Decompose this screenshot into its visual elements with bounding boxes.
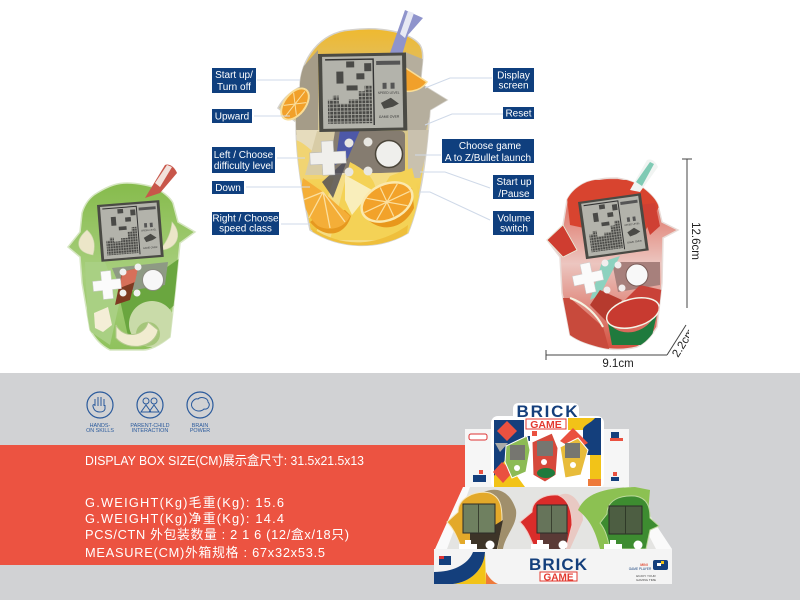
front panel corner art (434, 552, 498, 584)
front panel logo: GAMING TIME (636, 578, 656, 582)
label: display screen: Display (497, 70, 530, 82)
melon (129, 301, 175, 347)
icon: hands-on skills: ON SKILLS (86, 428, 114, 434)
dimension: width 9.1cm (546, 350, 667, 370)
front panel logo: ENJOY YOUR (636, 574, 657, 578)
watermelon half (608, 316, 657, 345)
display box (434, 402, 672, 584)
icon: hands-on skills: HANDS- (90, 423, 111, 429)
ear slices (79, 230, 94, 255)
box title: brick game top: BRICK (516, 402, 578, 421)
label: display screen (493, 68, 534, 92)
label: reset: Reset (505, 108, 532, 120)
text: pcs per carton: PCS/CTN 外包装数量 : 2 1 6 (12/盒x/18只) (85, 527, 349, 542)
box header artwork (491, 403, 604, 489)
label: start up / turn off: Start up/ (215, 70, 253, 81)
toy: green melon console (68, 165, 195, 350)
box front panel (434, 549, 672, 584)
melon slices (116, 322, 158, 346)
text: gross weight: G.WEIGHT(Kg)毛重(Kg): 15.6 (85, 495, 284, 510)
label: display screen: screen (498, 80, 529, 92)
front panel logo (629, 560, 668, 582)
label: volume switch: switch (500, 224, 528, 234)
label: choose game a to z / bullet launch (442, 139, 534, 164)
green toys row (578, 487, 659, 549)
dpads and buttons (459, 540, 642, 550)
yellow toys row (447, 490, 516, 549)
label: left / choose difficulty level: difficulty level (214, 161, 273, 172)
box back panel (465, 429, 629, 489)
mini red toy (532, 433, 558, 482)
side logos (469, 432, 623, 482)
text: display box size: DISPLAY BOX SIZE(CM)展示盒尺寸: 31.5x21.5x13 (85, 453, 364, 468)
bottom grey band (0, 373, 800, 600)
orange slice ear left (274, 82, 316, 126)
box title: brick game top: GAME (530, 419, 562, 431)
label: start up / turn off: Turn off (217, 82, 251, 93)
label: start up / pause (493, 175, 534, 200)
straw lower (335, 130, 360, 165)
label: start up / pause: Start up (496, 177, 532, 188)
label: left / choose difficulty level: Left / Choose (214, 150, 274, 161)
label: start up / pause: /Pause (498, 189, 530, 200)
red specification band (0, 445, 466, 565)
red toys row (520, 494, 583, 549)
screen (318, 52, 407, 132)
leader lines (246, 78, 503, 224)
tray interior (437, 487, 670, 549)
icon: parent-child interaction (130, 392, 170, 434)
orange slice left bottom (310, 210, 351, 233)
mini green toy (505, 436, 530, 478)
controls (92, 270, 122, 300)
label: choose game a to z / bullet launch: A to Z/Bullet launch (445, 153, 531, 164)
label: start up / turn off (212, 68, 256, 93)
straw (390, 10, 423, 55)
front panel logo: GAME PLAYER (629, 567, 652, 571)
icon: brain power: BRAIN (192, 423, 208, 429)
dimension: height 12.6cm: 12.6cm (689, 222, 701, 260)
icon: parent-child interaction: INTERACTION (132, 428, 168, 434)
label: volume switch: Volume (497, 214, 531, 224)
label: upward: Upward (215, 112, 249, 122)
screen (578, 193, 649, 259)
dimension: depth 2.2cm: 2.2cm (670, 327, 697, 360)
box title: brick game front: GAME (544, 572, 574, 584)
melon cubes (94, 307, 112, 332)
dimension: width 9.1cm: 9.1cm (602, 358, 634, 370)
console window (334, 131, 405, 173)
box title: brick game front (529, 555, 588, 584)
label: right / choose speed class: Right / Choose (212, 214, 279, 224)
controls (570, 260, 606, 296)
screen: SPEED LEVEL (624, 223, 641, 227)
screen: GAME OVER (627, 240, 642, 245)
straw (630, 159, 658, 192)
icon: brain power (187, 392, 213, 434)
screen: SPEED LEVEL (378, 91, 400, 95)
ear slices (547, 225, 577, 257)
screen: GAME OVER (379, 115, 400, 119)
orange slice ear right (397, 63, 427, 91)
screen: GAME OVER (143, 246, 158, 250)
label: left / choose difficulty level (212, 147, 275, 173)
icon: hands-on skills (86, 392, 114, 434)
text: carton measure: MEASURE(CM)外箱规格 : 67x32x53.5 (85, 545, 325, 560)
box title: brick game front: BRICK (529, 555, 588, 574)
label: volume switch (493, 211, 534, 235)
toy: watermelon console (547, 159, 678, 352)
icon: parent-child interaction: PARENT-CHILD (130, 423, 170, 429)
label: right / choose speed class (212, 212, 279, 235)
box title: brick game top (516, 402, 578, 431)
label: choose game a to z / bullet launch: Choose game (459, 141, 522, 152)
label: right / choose speed class: speed class (219, 224, 272, 234)
dimension: depth 2.2cm (666, 324, 689, 358)
label: upward (212, 109, 252, 123)
mini yellow toy (560, 438, 588, 478)
screen (97, 200, 164, 262)
dimension: height 12.6cm (682, 159, 701, 308)
front panel logo: MINI (640, 563, 648, 567)
orange slice large (354, 173, 420, 231)
controls (309, 140, 347, 176)
translucent sides (296, 50, 318, 135)
label: down (212, 181, 244, 194)
label: down: Down (215, 183, 241, 194)
toy: orange juice console (274, 10, 450, 250)
screen: SPEED LEVEL (141, 229, 157, 233)
icon: brain power: POWER (190, 428, 210, 434)
straw (145, 165, 177, 198)
text: net weight: G.WEIGHT(Kg)净重(Kg): 14.4 (85, 511, 284, 526)
